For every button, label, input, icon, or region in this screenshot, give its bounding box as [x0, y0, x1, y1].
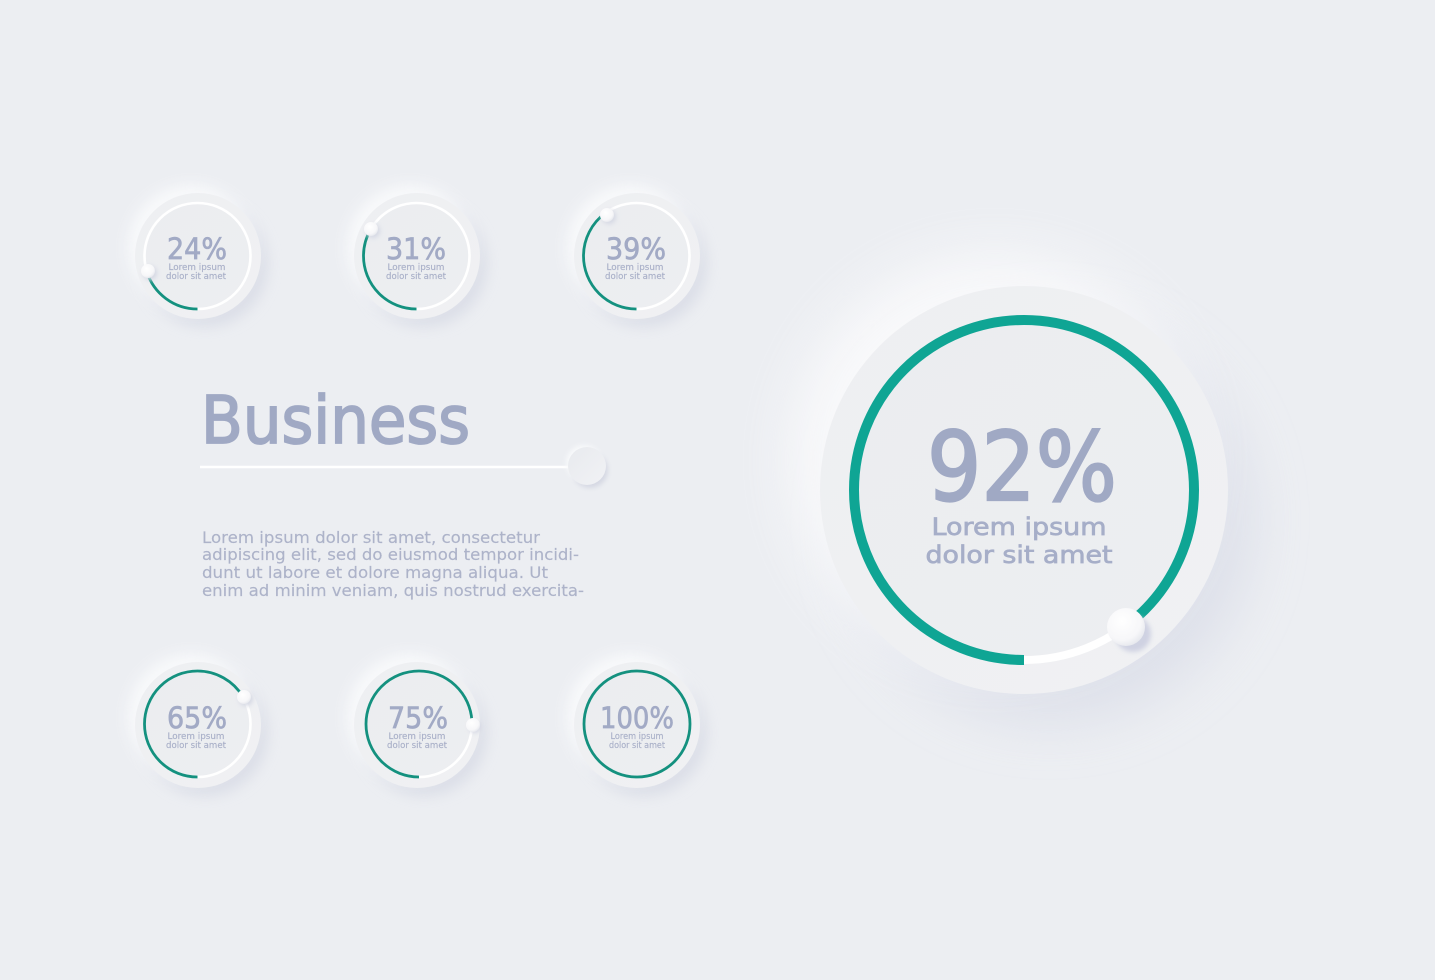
gauge: 65%: 65% [167, 701, 227, 735]
gauge: 75%: dolor sit amet [387, 741, 448, 751]
gauge: 100%: dolor sit amet [609, 741, 666, 751]
body text: Lorem ipsum dolor sit amet, consectetur [202, 528, 540, 547]
gauge: 39%: 39% [606, 232, 666, 266]
gauge: 75% [347, 654, 487, 796]
gauge: 65%: dolor sit amet [166, 741, 227, 751]
gauge: 75%: 75% [388, 701, 448, 735]
gauge: 24% [128, 185, 268, 327]
gauge: 39%: Lorem ipsum [606, 263, 664, 273]
gauge: 39%: dolor sit amet [605, 272, 666, 282]
gauge: 31%: Lorem ipsum [388, 263, 444, 273]
main gauge label: dolor sit amet [926, 541, 1112, 569]
body text: adipiscing elit, sed do eiusmod tempor incidi- [202, 545, 579, 564]
main gauge value: 92% [927, 413, 1117, 523]
main gauge face [854, 320, 1194, 660]
main gauge knob [1107, 608, 1145, 646]
main gauge remainder arc [854, 320, 1194, 660]
gauge: 31%: dolor sit amet [386, 272, 447, 282]
gauge: 75%: Lorem ipsum [388, 732, 446, 742]
gauge: 31%: 31% [386, 232, 446, 266]
gauge: 100%: 100% [600, 701, 674, 735]
main gauge label [926, 513, 1112, 569]
gauge: 65% [128, 654, 268, 796]
gauge: 39% [567, 185, 707, 327]
body text [202, 528, 584, 600]
main gauge label: Lorem ipsum [932, 513, 1106, 541]
gauge: 24%: 24% [167, 232, 227, 266]
gauge: 31% [347, 185, 487, 327]
gauge: 24%: Lorem ipsum [168, 263, 226, 273]
gauge: 65%: Lorem ipsum [168, 732, 224, 742]
main gauge progress arc [854, 320, 1194, 660]
heading: Business: Business [201, 382, 470, 459]
body text: dunt ut labore et dolore magna aliqua. Ut [202, 563, 548, 582]
gauge: 24%: dolor sit amet [166, 272, 227, 282]
body text: enim ad minim veniam, quis nostrud exercita- [202, 581, 584, 600]
slider divider with knob [200, 445, 608, 488]
main gauge: 92% [790, 255, 1254, 724]
gauge: 100% [567, 654, 707, 796]
gauge: 100%: Lorem ipsum [610, 732, 664, 742]
